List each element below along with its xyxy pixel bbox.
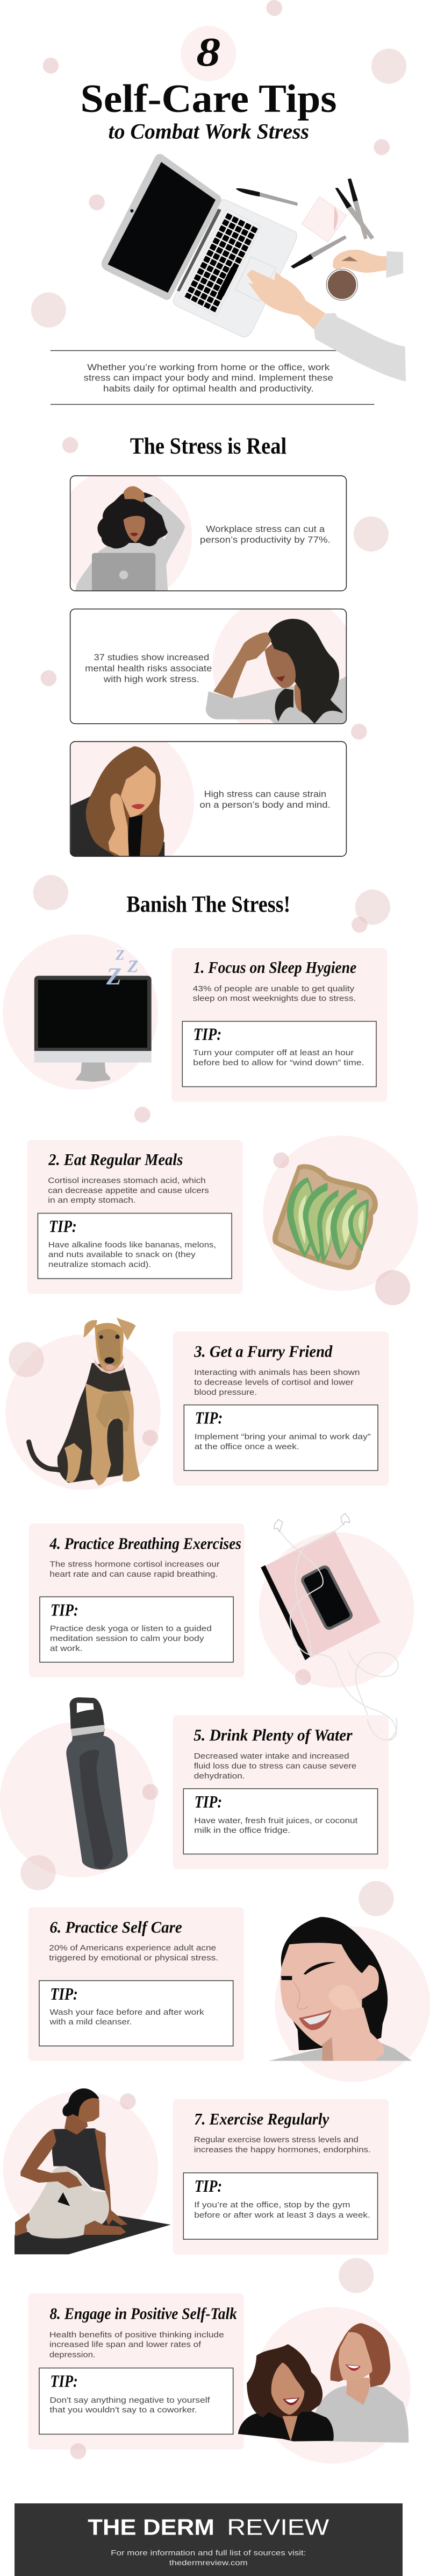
earphone cords <box>280 1525 398 1740</box>
tip heading: 8. Engage in Positive Self-Talk <box>49 2305 237 2323</box>
tip box: Implement “bring your animal to work day” <box>195 1432 371 1441</box>
tip body: fluid loss due to stress can cause severe <box>194 1762 356 1771</box>
card text: 37 studies show increased <box>94 653 209 662</box>
footer <box>15 2503 403 2576</box>
tip box <box>182 1021 376 1086</box>
tip body: dehydration. <box>194 1772 245 1781</box>
footer logo: THE DERM <box>88 2515 214 2540</box>
tip heading: 1. Focus on Sleep Hygiene <box>194 958 356 977</box>
tip box: TIP: <box>195 2177 222 2196</box>
panel: tip 6 <box>28 1907 244 2061</box>
icon: sleeping Z letters: Z <box>106 963 121 990</box>
tip body <box>194 2136 371 2154</box>
panel: tip 3 <box>173 1331 389 1486</box>
tip body: increased life span and lower rates of <box>49 2341 202 2349</box>
tip body <box>49 1561 220 1579</box>
tip body: 20% of Americans experience adult acne <box>49 1944 216 1952</box>
illustration: sleeping monitor <box>3 934 158 1090</box>
tip heading: 6. Practice Self Care <box>49 1918 182 1936</box>
tip body: Health benefits of positive thinking include <box>49 2331 224 2339</box>
tip box: before bed to allow for “wind down” time. <box>193 1059 364 1068</box>
tip heading: 7. Exercise Regularly <box>194 2110 329 2128</box>
tip box: TIP: <box>51 1601 78 1620</box>
sticky note <box>302 196 347 242</box>
icon: sleeping Z letters: Z <box>127 957 138 977</box>
panel: tip 2 <box>27 1140 243 1294</box>
tip body: Cortisol increases stomach acid, which <box>48 1176 206 1185</box>
intro text: habits daily for optimal health and productivity. <box>103 384 314 394</box>
tip body <box>194 1368 360 1397</box>
heading: The Stress is Real: The Stress is Real <box>130 434 286 459</box>
card: productivity <box>70 475 347 591</box>
intro text <box>84 363 333 394</box>
tip box: TIP: <box>50 2372 78 2391</box>
hand holding cup <box>333 250 403 278</box>
tip body: to decrease levels of cortisol and lower <box>194 1378 354 1387</box>
tip box <box>183 2173 378 2239</box>
tip box: that you wouldn't say to a coworker. <box>49 2406 197 2415</box>
card text: High stress can cause strain <box>204 789 326 799</box>
illustration: avocado toast <box>263 1135 418 1291</box>
tip box: Have alkaline foods like bananas, melons, <box>48 1241 216 1250</box>
tip box: Turn your computer off at least an hour <box>193 1049 354 1057</box>
footer text <box>111 2549 306 2567</box>
panel: tip 1 <box>171 948 387 1102</box>
heading: Self-Care Tips: Self-Care Tips <box>80 77 337 121</box>
tip box: Practice desk yoga or listen to a guided <box>50 1625 212 1633</box>
tip body: in an empty stomach. <box>48 1196 136 1205</box>
illustration: woman in yoga pose on mat <box>3 2088 171 2254</box>
divider rules <box>51 351 374 405</box>
card text: on a person’s body and mind. <box>199 800 331 810</box>
illustration: notebook, phone and earphones <box>259 1513 414 1740</box>
tip body: heart rate and can cause rapid breathing. <box>49 1570 218 1579</box>
tip box: before or after work at least 3 days a week. <box>194 2211 370 2220</box>
footer logo <box>88 2515 329 2540</box>
illustration: desk with laptop, pens, note, coffee and hands <box>51 154 406 405</box>
icon: sleeping Z letters: Z <box>115 947 125 963</box>
card text <box>199 789 331 810</box>
illustration: water bottle <box>0 1697 158 1890</box>
tip body: Interacting with animals has been shown <box>194 1368 360 1377</box>
illustration: smiling woman touching cheek <box>269 1881 430 2082</box>
illustration: woman with laptop <box>75 486 185 593</box>
tip heading: 3. Get a Furry Friend <box>194 1342 333 1360</box>
tip box <box>38 1213 232 1279</box>
tip body: sleep on most weeknights due to stress. <box>193 994 356 1003</box>
pens <box>236 179 374 269</box>
card: strain <box>70 741 347 857</box>
tip box <box>184 1405 378 1471</box>
card text <box>85 653 212 684</box>
tip body <box>49 2331 224 2360</box>
tip heading: 2. Eat Regular Meals <box>48 1151 183 1169</box>
footer text: thedermreview.com <box>169 2559 248 2567</box>
tip body: can decrease appetite and cause ulcers <box>48 1187 209 1195</box>
illustration: woman holding forehead <box>206 619 346 724</box>
panel: tip 4 <box>29 1523 245 1677</box>
illustration: two laughing women <box>238 2307 411 2464</box>
card text: mental health risks associate <box>85 664 212 673</box>
panel: tip 7 <box>173 2099 389 2255</box>
tip body: depression. <box>49 2351 96 2360</box>
tip box: neutralize stomach acid). <box>48 1261 151 1269</box>
tip body: Decreased water intake and increased <box>194 1752 349 1761</box>
tip body: increases the happy hormones, endorphins. <box>194 2146 371 2154</box>
coffee cup <box>326 269 357 300</box>
tip box <box>39 2368 233 2434</box>
tip box <box>40 1597 233 1662</box>
laptop <box>102 154 297 337</box>
tip box: at work. <box>50 1645 83 1653</box>
tip heading: 5. Drink Plenty of Water <box>194 1726 353 1745</box>
tip box: and nuts available to snack on (they <box>48 1251 196 1259</box>
tip body: blood pressure. <box>194 1388 257 1397</box>
tip box <box>183 1789 378 1854</box>
tip box: milk in the office fridge. <box>194 1826 290 1835</box>
card text: person’s productivity by 77%. <box>200 535 331 545</box>
tip box: Have water, fresh fruit juices, or coconut <box>194 1817 357 1825</box>
footer text: For more information and full list of sources visit: <box>111 2549 306 2557</box>
tip box: TIP: <box>195 1792 222 1811</box>
tip box: TIP: <box>50 1985 78 2003</box>
card text: with high work stress. <box>103 674 199 684</box>
footer logo: REVIEW <box>227 2515 329 2540</box>
avocado slices <box>287 1177 369 1263</box>
tip body <box>194 1752 356 1781</box>
card text: Workplace stress can cut a <box>206 524 325 534</box>
badge: number 8: 8 <box>196 29 220 75</box>
tip body: triggered by emotional or physical stress. <box>49 1954 218 1963</box>
tip body <box>49 1944 218 1963</box>
tip box: Wash your face before and after work <box>49 2008 204 2017</box>
icon: sleeping Z letters <box>106 947 138 990</box>
card: mental health <box>70 608 347 724</box>
tip box: Don't say anything negative to yourself <box>49 2396 210 2405</box>
tip body <box>193 985 356 1003</box>
subheading: to Combat Work Stress <box>109 120 309 144</box>
earphone cord end <box>368 1718 397 1740</box>
illustration: woman with hand on cheek <box>71 746 164 856</box>
tip box: TIP: <box>195 1408 223 1427</box>
panel: tip 8 <box>28 2293 244 2450</box>
intro text: stress can impact your body and mind. Implement these <box>84 373 333 383</box>
tip box: at the office once a week. <box>195 1443 299 1451</box>
tip heading: 4. Practice Breathing Exercises <box>49 1535 241 1553</box>
tip box: If you’re at the office, stop by the gym <box>194 2201 350 2210</box>
tip box <box>39 1981 233 2046</box>
intro text: Whether you’re working from home or the office, work <box>87 363 330 372</box>
title block <box>80 26 337 144</box>
tip box: meditation session to calm your body <box>50 1634 204 1643</box>
panel: tip 5 <box>173 1715 389 1869</box>
illustration: airedale dog <box>5 1317 161 1490</box>
tip body <box>48 1176 209 1205</box>
heading: Banish The Stress!: Banish The Stress! <box>126 892 290 917</box>
tip box: TIP: <box>194 1025 221 1044</box>
tip body: 43% of people are unable to get quality <box>193 985 355 993</box>
badge: number 8 <box>181 26 236 81</box>
hand on trackpad with sleeve <box>247 270 406 382</box>
tip body: Regular exercise lowers stress levels and <box>194 2136 359 2144</box>
tip box: TIP: <box>49 1217 77 1236</box>
tip body: The stress hormone cortisol increases our <box>49 1561 220 1569</box>
tip box: with a mild cleanser. <box>49 2018 132 2027</box>
card text <box>200 524 331 545</box>
